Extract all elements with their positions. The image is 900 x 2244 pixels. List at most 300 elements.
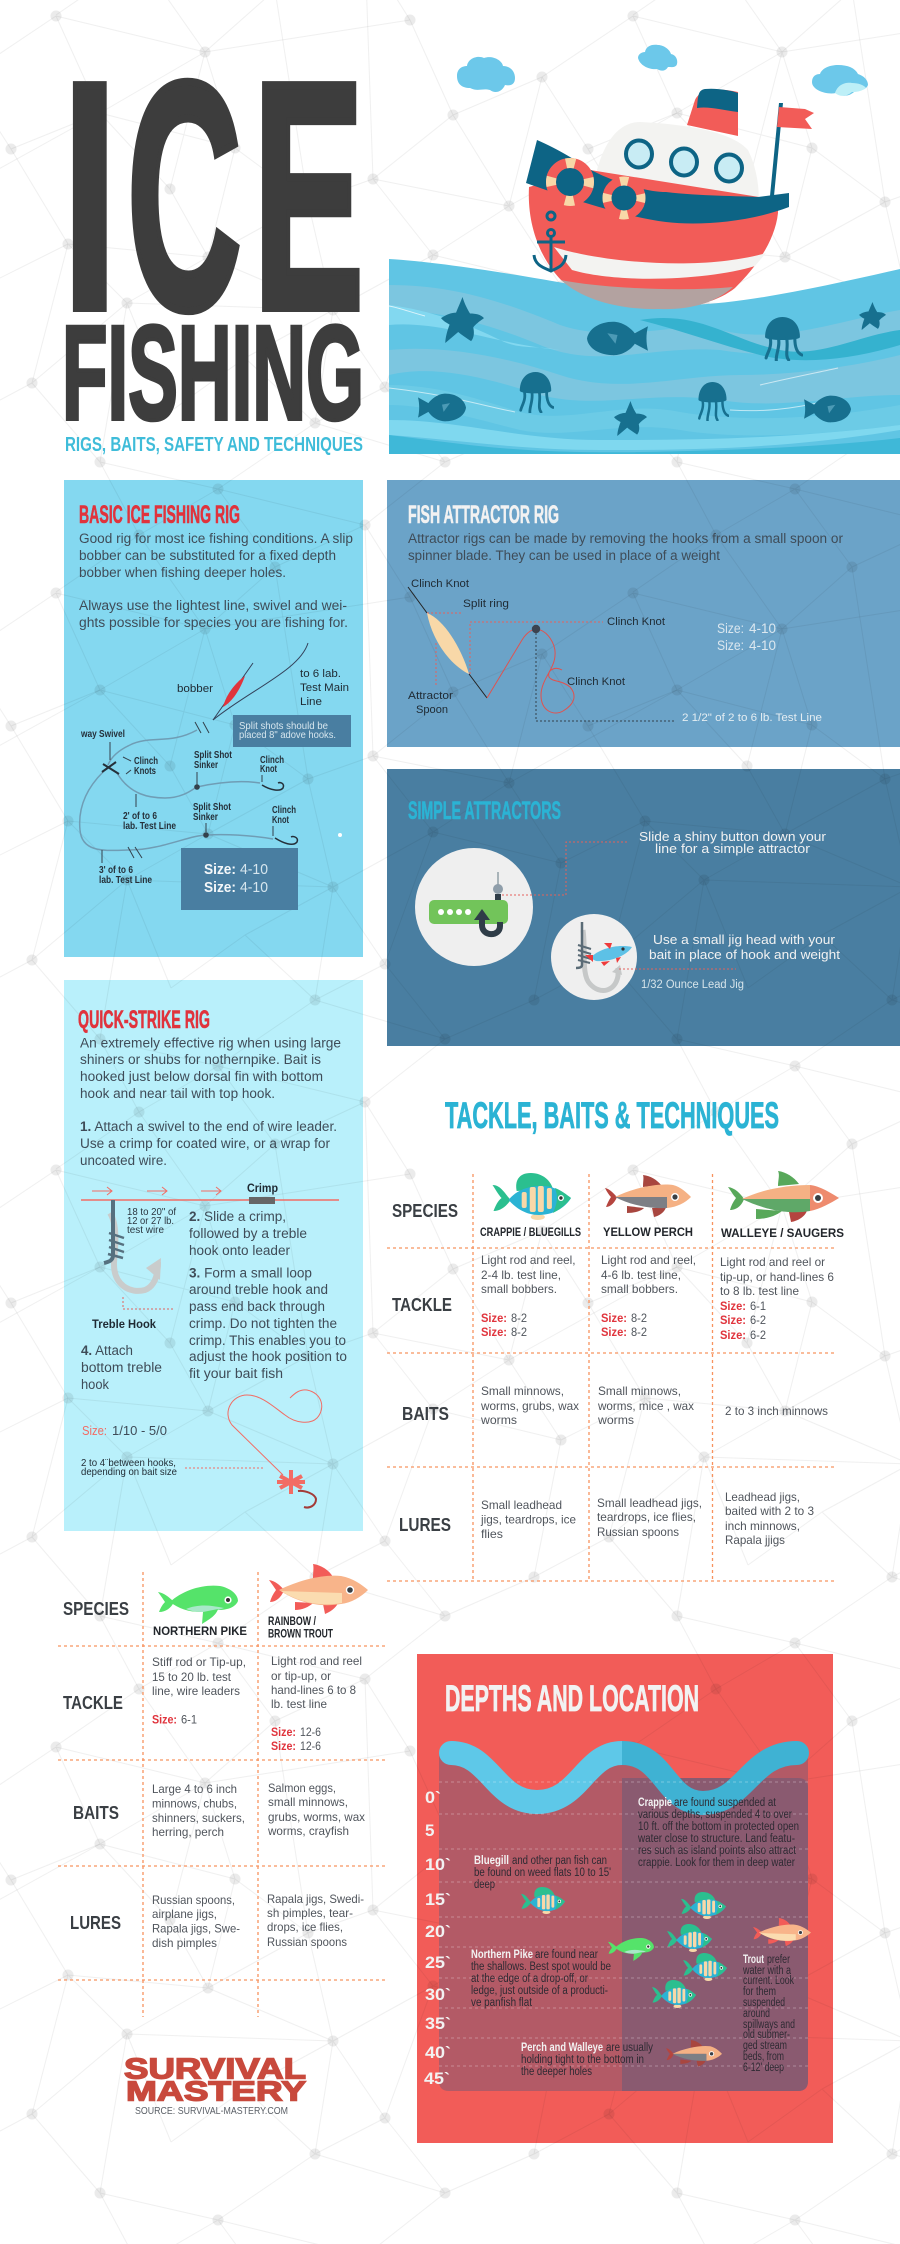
text block: step 2: 2. Slide a crimp, <box>189 1209 286 1224</box>
icon: lifebuoy right <box>607 181 641 215</box>
tackle: trout: or tip-up, or <box>271 1669 331 1683</box>
lures: perch: Small leadhead jigs, <box>597 1496 702 1510</box>
tackle: walleye: Size: <box>720 1313 746 1327</box>
panel: quick-strike rig background <box>64 980 363 1531</box>
text block: trout: around <box>743 2008 770 2020</box>
depth scale: 25` <box>425 1953 451 1972</box>
icon: hull <box>529 170 778 310</box>
tackle: trout: Size: <box>271 1739 296 1753</box>
tackle: crappie: 8-2 <box>511 1311 527 1325</box>
text block: intro <box>80 1036 341 1101</box>
depth scale: 5 <box>425 1821 434 1840</box>
icon: lifebuoy left <box>551 163 589 201</box>
tackle: crappie: 8-2 <box>511 1325 527 1339</box>
tackle: trout <box>271 1654 362 1753</box>
labels: Clinch Knot <box>411 578 469 590</box>
labels: Attractor <box>408 690 453 702</box>
rig lines <box>80 643 308 863</box>
lures: crappie: jigs, teardrops, ice <box>480 1512 576 1526</box>
hook sizes <box>717 620 776 653</box>
text block: northern pike: Northern Pike <box>471 1949 533 1961</box>
callout: split shots note: Split shots should be <box>239 721 328 732</box>
text block: perch and walleye: are usually <box>606 2042 653 2054</box>
tackle: pike: 15 to 20 lb. test <box>152 1670 232 1684</box>
baits: walleye: 2 to 3 inch minnows <box>725 1404 828 1418</box>
text block: description: Attractor rigs can be made by removing the hooks from a small spoon or <box>408 531 844 546</box>
depth scale: 10` <box>425 1855 451 1874</box>
baits: pike: minnows, chubs, <box>152 1796 237 1810</box>
icon: treble hook: test wire <box>127 1224 164 1236</box>
text block: trout: spillways and <box>743 2019 795 2031</box>
labels: Spoon <box>416 704 448 716</box>
callout: split shots note: placed 8" adove hooks. <box>239 730 336 741</box>
diagram: leader with crimp: Crimp <box>247 1183 278 1195</box>
labels: Sinker <box>194 759 218 771</box>
column headings: YELLOW PERCH <box>603 1225 693 1239</box>
diagram: attractor rig <box>408 578 822 724</box>
table: tackle chart, right <box>387 1171 844 1581</box>
depth scale: 40` <box>425 2043 451 2062</box>
icon: button attractor <box>415 848 533 966</box>
icon: deck band <box>526 140 789 223</box>
text block: description: ghts possible for species you are fishing for. <box>79 615 348 630</box>
lures: pike: dish pimples <box>152 1936 217 1950</box>
lures: perch <box>597 1496 702 1539</box>
tackle: crappie: Light rod and reel, <box>481 1253 576 1267</box>
text block: step 3: crimp. This enables you to <box>189 1333 346 1348</box>
icon: sea creatures <box>418 297 886 436</box>
hook sizes: 4-10 <box>749 620 776 636</box>
labels: Split Shot <box>193 801 231 813</box>
text block: description: bobber can be substituted for a fixed depth <box>79 548 336 563</box>
baits: perch: worms, mice , wax <box>597 1399 694 1413</box>
icon: spoon <box>427 613 469 674</box>
labels: Sinker <box>193 811 218 823</box>
text block: crappie: water close to structure. Land featu- <box>637 1833 795 1845</box>
icon: jig head <box>551 914 637 1000</box>
text block: intro: An extremely effective rig when using large <box>80 1036 341 1050</box>
connector lines <box>502 842 736 969</box>
text block: step 3: pass end back through <box>189 1299 325 1314</box>
tackle: crappie: 2-4 lb. test line, <box>481 1268 561 1282</box>
tackle: trout: Size: <box>271 1725 296 1739</box>
icon: northern pike <box>158 1586 238 1624</box>
diagram: leader with crimp <box>81 1183 339 1204</box>
tackle: walleye: 6-2 <box>750 1328 766 1342</box>
subtitle: RIGS, BAITS, SAFETY AND TECHNIQUES <box>65 434 363 456</box>
table: tackle chart, left <box>58 1564 385 2017</box>
title: ICE FISHING <box>62 15 364 448</box>
text block: bluegill: be found on weed flats 10 to 15' <box>474 1867 611 1879</box>
text block: step 4: bottom treble <box>81 1360 162 1375</box>
text block: trout: prefer <box>767 1954 790 1966</box>
labels: lab. Test Line <box>99 874 152 886</box>
column headings: NORTHERN PIKE <box>153 1624 247 1638</box>
text block: step 1: 1. Attach a swivel to the end of wire leader. <box>80 1119 337 1134</box>
labels: Clinch <box>272 804 296 816</box>
baits: perch: Small minnows, <box>598 1384 681 1398</box>
baits: pike: shinners, suckers, <box>152 1811 245 1825</box>
deep water overlay <box>622 1778 808 2091</box>
text block: step 3: fit your bait fish <box>189 1366 283 1381</box>
icon: crappie <box>492 1173 571 1220</box>
baits: pike: herring, perch <box>152 1825 224 1839</box>
callout: hook sizes <box>181 848 298 910</box>
tackle: pike: line, wire leaders <box>152 1684 240 1698</box>
text block: trout: 6-12' deep <box>743 2062 784 2074</box>
icon: treble hook: 18 to 20" of <box>127 1206 176 1218</box>
icon: treble hook <box>92 1200 176 1331</box>
tackle: perch <box>601 1253 696 1339</box>
tackle: perch: Size: <box>601 1311 627 1325</box>
text block: northern pike: are found near <box>535 1949 598 1961</box>
text block: crappie: Crappie <box>638 1797 672 1809</box>
column headings: CRAPPIE / BLUEGILLS <box>480 1225 581 1239</box>
labels: Clinch Knot <box>567 676 625 688</box>
depth scale: 0` <box>425 1788 441 1807</box>
labels: Split Shot <box>194 749 232 761</box>
logo: survival mastery <box>124 2054 306 2106</box>
panel: simple attractors content <box>408 797 840 1000</box>
row labels: BAITS <box>73 1803 119 1823</box>
panel: simple attractors background <box>387 769 900 1046</box>
baits: crappie: worms, grubs, wax <box>480 1399 579 1413</box>
icon: anchor <box>534 212 566 271</box>
labels: 2' of to 6 <box>123 810 157 822</box>
lures: pike <box>152 1893 240 1950</box>
text block: step 3: adjust the hook position to <box>189 1349 347 1364</box>
tackle: crappie <box>481 1253 576 1339</box>
text block: step 4 <box>81 1343 162 1392</box>
text block: trout <box>742 1954 795 2074</box>
text block: trout: old submer- <box>743 2029 790 2041</box>
labels <box>80 668 349 886</box>
heading: DEPTHS AND LOCATION <box>445 1678 699 1719</box>
text block: trout: ged stream <box>743 2040 787 2052</box>
column headings: BROWN TROUT <box>268 1626 333 1640</box>
text block: bluegill: Bluegill <box>474 1855 509 1867</box>
column headings: RAINBOW / <box>268 1614 316 1628</box>
row labels: SPECIES <box>63 1599 129 1619</box>
diagram: basic rig <box>80 643 351 910</box>
tackle: walleye: Size: <box>720 1299 746 1313</box>
panel: depths and location background <box>417 1654 833 2143</box>
labels: Knot <box>260 763 277 775</box>
text block: step 3: around treble hook and <box>189 1282 328 1297</box>
icon: sea <box>389 255 900 456</box>
text block: step 4: hook <box>81 1377 109 1392</box>
depth scale: 15` <box>425 1890 451 1909</box>
tackle: pike: Stiff rod or Tip-up, <box>152 1655 246 1669</box>
title: ICE FISHING: FISHING <box>62 299 364 448</box>
icon: submerged hull <box>561 280 733 309</box>
text block: trout: water with a <box>742 1965 791 1977</box>
icon: flag <box>770 103 814 196</box>
hook sizes: 4-10 <box>749 637 776 653</box>
tackle: walleye <box>720 1255 834 1342</box>
row labels <box>392 1201 458 1535</box>
callout: hook sizes: 4-10 <box>240 861 268 878</box>
labels: 2 1/2" of 2 to 6 lb. Test Line <box>682 712 822 724</box>
panel: quick-strike rig content <box>78 833 347 1508</box>
tackle: walleye: Size: <box>720 1328 746 1342</box>
illustration: boat and sea <box>389 89 900 456</box>
text block: intro: shiners or shubs for nothernpike. Bait is <box>80 1052 321 1067</box>
labels: Line <box>300 696 322 708</box>
tackle: trout: 12-6 <box>300 1739 321 1753</box>
callout: hook sizes: Size: <box>204 879 236 896</box>
labels: way Swivel <box>80 728 125 740</box>
tackle: perch: Light rod and reel, <box>601 1253 696 1267</box>
tackle: crappie: Size: <box>481 1311 507 1325</box>
panel: basic ice fishing rig background <box>64 480 363 957</box>
lures: walleye <box>725 1490 814 1547</box>
tackle: perch: 8-2 <box>631 1325 647 1339</box>
lures: pike: airplane jigs, <box>152 1907 217 1921</box>
hook size: 1/10 - 5/0 <box>112 1423 167 1438</box>
baits: perch <box>597 1384 694 1427</box>
logo: survival mastery: MASTERY <box>126 2076 306 2106</box>
text block: button tip: line for a simple attractor <box>655 841 811 856</box>
baits: trout: small minnows, <box>268 1795 348 1809</box>
note: between hooks <box>81 1457 177 1478</box>
lures: pike: Russian spoons, <box>152 1893 235 1907</box>
baits: pike: Large 4 to 6 inch <box>152 1782 237 1796</box>
text block: bluegill: deep <box>474 1879 495 1891</box>
text block: step 2: hook onto leader <box>189 1243 291 1258</box>
baits: trout: grubs, worms, wax <box>268 1810 365 1824</box>
tackle: walleye: 6-1 <box>750 1299 766 1313</box>
text block: step 1: uncoated wire. <box>80 1153 167 1168</box>
text block: trout: beds, from <box>743 2051 784 2063</box>
icon: treble hook: 12 or 27 lb. <box>127 1215 174 1227</box>
labels <box>408 578 822 724</box>
text block: intro: hook and near tail with top hook. <box>80 1086 275 1101</box>
text block: jig tip: Use a small jig head with your <box>653 932 836 947</box>
tackle: trout: lb. test line <box>271 1697 327 1711</box>
hook size <box>82 1423 167 1438</box>
lures: crappie: flies <box>481 1527 503 1541</box>
icon: hull white stripe <box>554 247 766 279</box>
baits: pike <box>152 1782 245 1839</box>
lures: crappie: Small leadhead <box>481 1498 562 1512</box>
lures: perch: teardrops, ice flies, <box>597 1510 696 1524</box>
lures: trout <box>267 1892 364 1949</box>
labels: 3' of to 6 <box>99 864 133 876</box>
depth scale: 20` <box>425 1922 451 1941</box>
baits: trout: Salmon eggs, <box>268 1781 336 1795</box>
baits: crappie <box>480 1384 579 1427</box>
column headings: WALLEYE / SAUGERS <box>721 1226 844 1240</box>
row labels: BAITS <box>402 1404 449 1424</box>
tackle: crappie: Size: <box>481 1325 507 1339</box>
title: ICE FISHING: E <box>253 15 364 377</box>
hook sizes: Size: <box>717 637 744 653</box>
tackle: trout: 12-6 <box>300 1725 321 1739</box>
row labels: LURES <box>70 1913 121 1933</box>
labels: Clinch <box>260 754 284 766</box>
text block: description <box>79 531 353 630</box>
labels: lab. Test Line <box>123 820 176 832</box>
text block: step 3 <box>189 1266 347 1381</box>
icon: yellow perch <box>605 1175 691 1217</box>
depth scale: 45` <box>424 2069 450 2088</box>
lures: crappie <box>480 1498 576 1541</box>
hook size: Size: <box>82 1423 107 1438</box>
text block: northern pike: ve panfish flat <box>471 1997 533 2009</box>
labels: Split ring <box>463 598 509 610</box>
text block: bluegill: and other pan fish can <box>512 1855 607 1867</box>
text block: northern pike <box>471 1949 611 2009</box>
text block: button tip: Slide a shiny button down your <box>639 829 827 844</box>
text block: crappie: crappie. Look for them in deep water <box>638 1857 795 1869</box>
tackle: pike <box>152 1655 246 1726</box>
callout: hook sizes: 4-10 <box>240 879 268 896</box>
icon: funnel <box>687 89 738 136</box>
tackle: trout: Light rod and reel <box>271 1654 362 1668</box>
baits: crappie: Small minnows, <box>481 1384 564 1398</box>
labels: Clinch Knot <box>607 616 665 628</box>
source line: SOURCE: SURVIVAL-MASTERY.COM <box>135 2105 288 2117</box>
text block: step 2 <box>189 1209 307 1258</box>
lures: walleye: inch minnows, <box>725 1519 800 1533</box>
text block: trout: current. Look <box>743 1975 794 1987</box>
baits: trout <box>267 1781 365 1838</box>
panel: fish attractor rig background <box>387 480 900 747</box>
column headings <box>153 1614 333 1640</box>
tackle: walleye: 6-2 <box>750 1313 766 1327</box>
labels: Knots <box>134 765 156 777</box>
text block: perch and walleye <box>521 2042 653 2078</box>
depth scale <box>424 1788 451 2088</box>
lures: trout: drops, ice flies, <box>267 1920 343 1934</box>
labels: bobber <box>177 683 213 695</box>
baits: crappie: worms <box>480 1413 517 1427</box>
tackle: perch: 8-2 <box>631 1311 647 1325</box>
labels: Clinch <box>134 755 158 767</box>
depth scale: 35` <box>425 2014 451 2033</box>
text block: perch and walleye: Perch and Walleye <box>521 2042 603 2054</box>
depth scale: 30` <box>425 1985 451 2004</box>
text block: step 3: crimp. Do not tighten the <box>189 1316 337 1331</box>
icon: knot <box>532 625 540 633</box>
lures: perch: Russian spoons <box>597 1525 679 1539</box>
baits: perch: worms <box>597 1413 634 1427</box>
note: between hooks: 2 to 4¨between hooks, <box>81 1457 176 1469</box>
row labels: LURES <box>399 1515 451 1535</box>
tackle: perch: 4-6 lb. test line, <box>601 1268 681 1282</box>
text block: step 4: 4. Attach <box>81 1343 133 1358</box>
icon: wave surface <box>445 1747 803 1803</box>
text block: jig tip <box>649 932 840 962</box>
panel: fish attractor rig content <box>408 501 844 724</box>
icon: clouds <box>457 45 868 96</box>
icon: bobber <box>223 676 245 707</box>
icon: portholes <box>626 140 742 182</box>
callout: split shots note <box>233 715 351 747</box>
text block: crappie: are found suspended at <box>674 1797 777 1809</box>
baits: trout: worms, crayfish <box>267 1824 349 1838</box>
heading: FISH ATTRACTOR RIG <box>408 501 559 529</box>
text block: perch and walleye: the deeper holes <box>521 2066 592 2078</box>
lures: walleye: Leadhead jigs, <box>725 1490 800 1504</box>
note: between hooks: depending on bait size <box>81 1466 177 1478</box>
column headings <box>480 1225 844 1240</box>
row labels <box>63 1599 129 1933</box>
text block: step 1 <box>80 1119 337 1168</box>
tackle: walleye: to 8 lb. test line <box>720 1284 799 1298</box>
row labels: SPECIES <box>392 1201 458 1221</box>
white dot <box>338 833 342 837</box>
text block: crappie: 10 ft. off the bottom in protected open <box>638 1821 799 1833</box>
text block: intro: hooked just below dorsal fin with bottom <box>80 1069 323 1084</box>
tackle: pike: 6-1 <box>181 1712 197 1726</box>
text block: description: spinner blade. They can be used in place of a weight <box>408 548 720 563</box>
heading: BASIC ICE FISHING RIG <box>79 501 240 529</box>
lures: walleye: baited with 2 to 3 <box>725 1504 814 1518</box>
labels: Test Main <box>300 682 349 694</box>
text block: trout: for them <box>743 1986 776 1998</box>
icon: sinkers <box>194 784 209 838</box>
text block: northern pike: the shallows. Best spot would be <box>471 1961 611 1973</box>
lures: walleye: Rapala jjigs <box>725 1533 785 1547</box>
logo: survival mastery: SURVIVAL <box>124 2054 306 2086</box>
tackle: walleye: Light rod and reel or <box>720 1255 825 1269</box>
jig label: 1/32 Ounce Lead Jig <box>641 979 744 991</box>
depth lines <box>439 1782 808 2066</box>
text block: crappie: res such as island points also attract <box>638 1845 797 1857</box>
text block: northern pike: at the edge of a drop-off, or <box>471 1973 588 1985</box>
lures: trout: Russian spoons <box>267 1935 347 1949</box>
grid lines <box>387 1174 836 1581</box>
icon: quick-strike rig line <box>185 1390 322 1508</box>
text block: jig tip: bait in place of hook and weight <box>649 947 840 962</box>
text block: description: Good rig for most ice fishing conditions. A slip <box>79 531 353 546</box>
row labels: TACKLE <box>63 1693 123 1713</box>
hook sizes: Size: <box>717 620 744 636</box>
icons: fish at depth <box>521 1887 811 2066</box>
text block: crappie <box>637 1797 799 1869</box>
row labels: TACKLE <box>392 1295 452 1315</box>
labels: Knot <box>272 814 289 826</box>
icon: cabin <box>597 122 759 205</box>
text block: description <box>408 531 844 563</box>
text block: crappie: various depths, suspended 4 to over <box>638 1809 792 1821</box>
water column <box>439 1753 808 2091</box>
icon: treble hook: Treble Hook <box>92 1319 157 1331</box>
heading: QUICK-STRIKE RIG <box>78 1006 210 1034</box>
tackle: perch: small bobbers. <box>601 1282 678 1296</box>
text block: step 1: Use a crimp for coated wire, or a wrap for <box>80 1136 331 1151</box>
text block: description: Always use the lightest line, swivel and wei- <box>79 598 347 613</box>
lures: trout: sh pimples, tear- <box>267 1906 353 1920</box>
panel: depths and location content <box>424 1678 811 2091</box>
tackle: walleye: tip-up, or hand-lines 6 <box>720 1270 834 1284</box>
text block: northern pike: ledge, just outside of a producti- <box>471 1985 608 1997</box>
rig lines <box>408 587 675 721</box>
labels: to 6 lab. <box>300 668 341 680</box>
text block: trout: suspended <box>743 1997 785 2009</box>
tackle: perch: Size: <box>601 1325 627 1339</box>
text block: button tip <box>639 829 827 856</box>
text block: trout: Trout <box>743 1954 764 1966</box>
text block: step 2: followed by a treble <box>189 1226 307 1241</box>
icon: rainbow trout <box>269 1564 368 1614</box>
tackle: trout: hand-lines 6 to 8 <box>271 1683 356 1697</box>
text block: step 3: 3. Form a small loop <box>189 1266 312 1280</box>
text block: bluegill <box>474 1855 611 1891</box>
callout: hook sizes: Size: <box>204 861 236 878</box>
